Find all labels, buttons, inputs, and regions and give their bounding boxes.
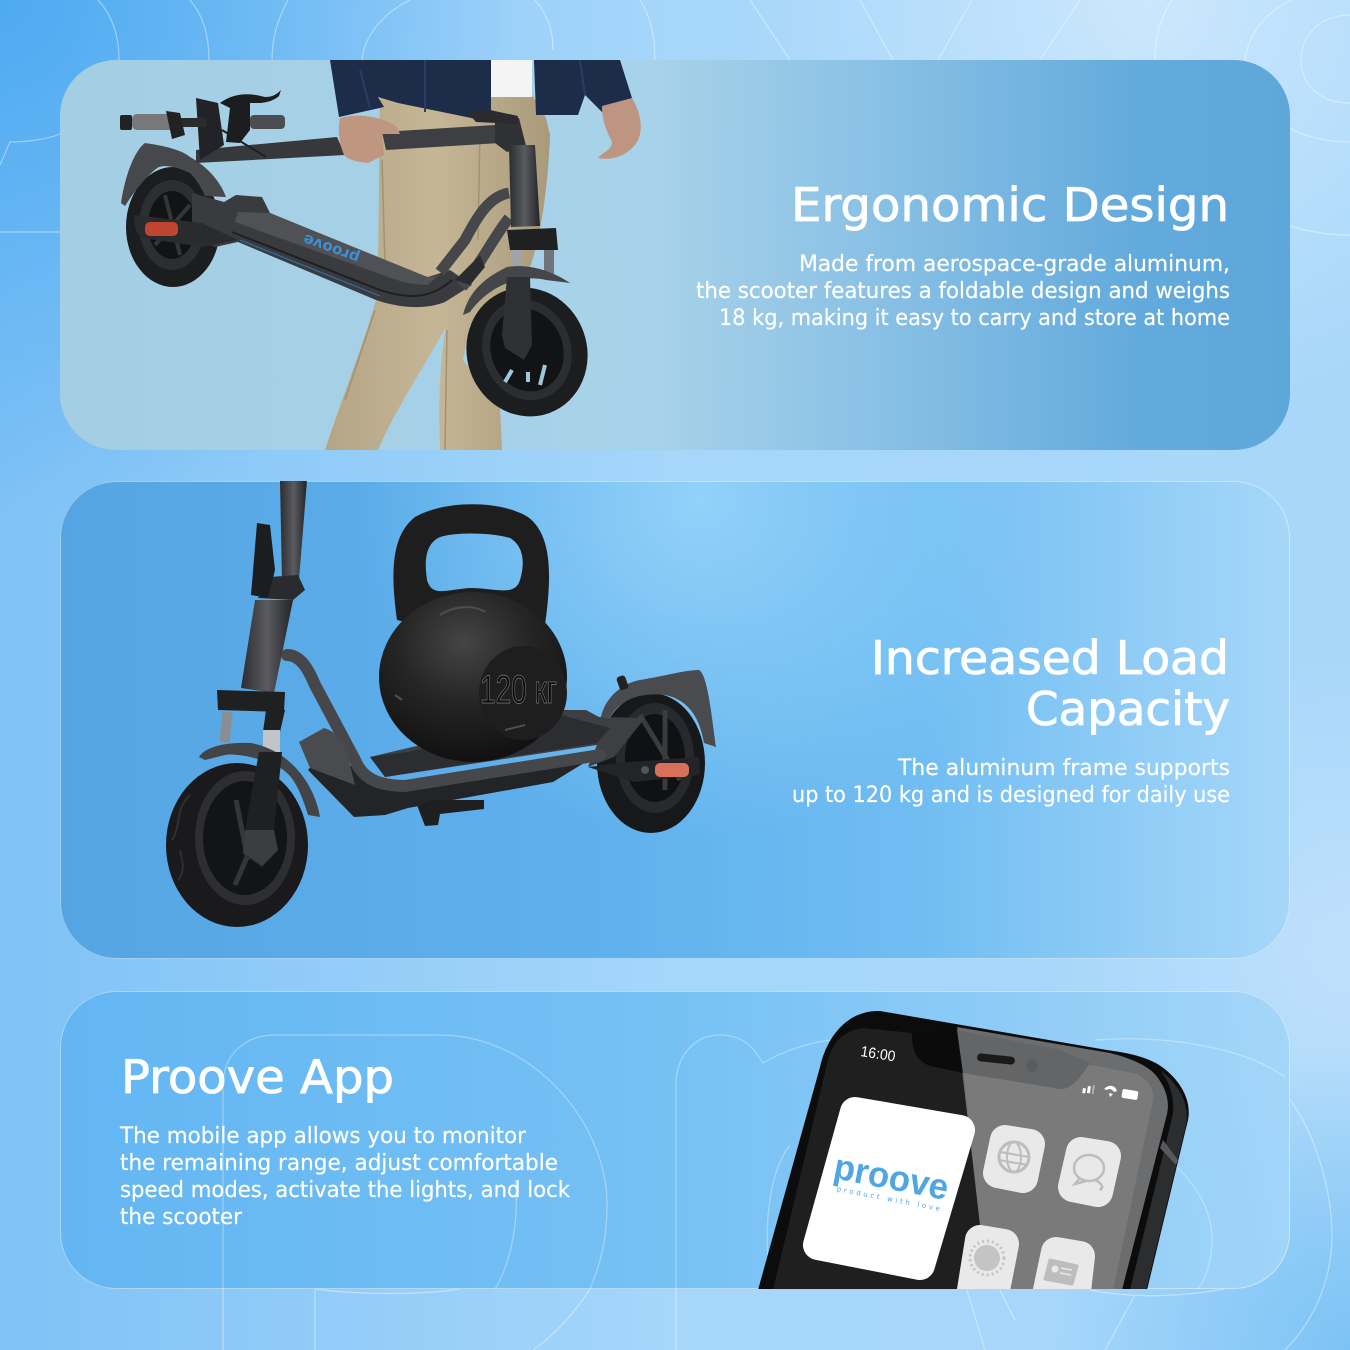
scooter front wheel xyxy=(166,763,308,927)
app icon: proove: proove xyxy=(831,1146,952,1208)
text: proove app body xyxy=(119,1124,570,1230)
status bar time: 16:00 xyxy=(859,1043,897,1065)
scooter front fender and fork xyxy=(199,743,320,868)
scooter frame tube xyxy=(287,655,600,786)
kettlebell xyxy=(379,504,567,762)
scooter deck xyxy=(192,193,472,307)
scooter front deck cover xyxy=(299,728,355,785)
text: proove app body: The mobile app allows you to monitor xyxy=(119,1124,527,1149)
kickstand xyxy=(417,800,484,826)
scooter front wheel xyxy=(466,288,588,416)
text: ergonomic design body: Made from aerospace-grade aluminum, xyxy=(799,252,1230,277)
app icon: brightness xyxy=(970,1240,1004,1290)
scooter handlebar xyxy=(120,90,285,157)
phone notch xyxy=(912,1027,963,1073)
text: ergonomic design body: 18 kg, making it easy to carry and store at home xyxy=(719,306,1230,331)
panel: proove app xyxy=(60,991,1290,1300)
text: load capacity body: up to 120 kg and is designed for daily use xyxy=(792,783,1230,808)
status bar icons xyxy=(1082,1085,1139,1100)
scooter deck xyxy=(370,710,645,777)
phone body xyxy=(758,1011,1189,1290)
scooter stem and column xyxy=(217,480,307,752)
scooter logo: proove xyxy=(301,230,362,267)
photo: person holding folded scooter xyxy=(120,60,641,450)
text: proove app body: speed modes, activate the lights, and lock xyxy=(120,1178,570,1203)
app icon: contact card xyxy=(1045,1252,1080,1300)
phone screen glare xyxy=(957,1027,1168,1290)
heading: increased load capacity: Capacity xyxy=(1026,682,1230,736)
scooter steering column xyxy=(507,145,558,274)
person: trousers xyxy=(325,95,550,450)
phone speaker xyxy=(977,1053,1015,1065)
heading: ergonomic design: Ergonomic Design xyxy=(791,178,1229,232)
panel: increased load capacity xyxy=(60,480,1290,959)
scooter front fender and fork xyxy=(463,266,570,360)
kettlebell label: 120 кг xyxy=(480,668,557,712)
heading: proove app: Proove App xyxy=(121,1050,394,1104)
phone metal rim xyxy=(1130,1070,1187,1290)
person: jacket xyxy=(330,60,632,122)
text: ergonomic design body xyxy=(696,252,1230,331)
text: proove app body: the scooter xyxy=(120,1205,243,1230)
person: shirt xyxy=(491,60,532,97)
scooter folded stem xyxy=(196,98,526,163)
heading: increased load capacity: Increased Load xyxy=(871,631,1229,685)
app icon: proove xyxy=(818,1112,960,1265)
text: load capacity body: The aluminum frame supports xyxy=(897,756,1230,781)
text: ergonomic design body: the scooter features a foldable design and weighs xyxy=(696,279,1230,304)
scooter rear fender xyxy=(601,670,716,747)
scooter frame tubes xyxy=(440,193,509,287)
app icon: proove: product with love xyxy=(836,1185,941,1213)
scooter rear wheel xyxy=(126,167,220,287)
text: proove app body: the remaining range, adjust comfortable xyxy=(120,1151,558,1176)
app icon: chat xyxy=(1073,1152,1106,1192)
person: left hand xyxy=(339,116,400,163)
person: right hand xyxy=(598,98,641,159)
scooter rear fender xyxy=(121,143,226,206)
panel: ergonomic design xyxy=(60,60,1290,450)
app icon: globe xyxy=(998,1140,1030,1178)
photo: scooter with kettlebell xyxy=(166,480,716,927)
scooter rear reflector xyxy=(134,215,238,247)
phone screen xyxy=(774,1028,980,1289)
heading: increased load capacity xyxy=(871,631,1230,736)
scooter underbody battery xyxy=(308,764,583,817)
scooter rear wheel xyxy=(597,693,705,833)
phone mockup xyxy=(758,1011,1189,1300)
text: load capacity body xyxy=(792,756,1230,808)
scooter rear reflector xyxy=(588,757,700,782)
